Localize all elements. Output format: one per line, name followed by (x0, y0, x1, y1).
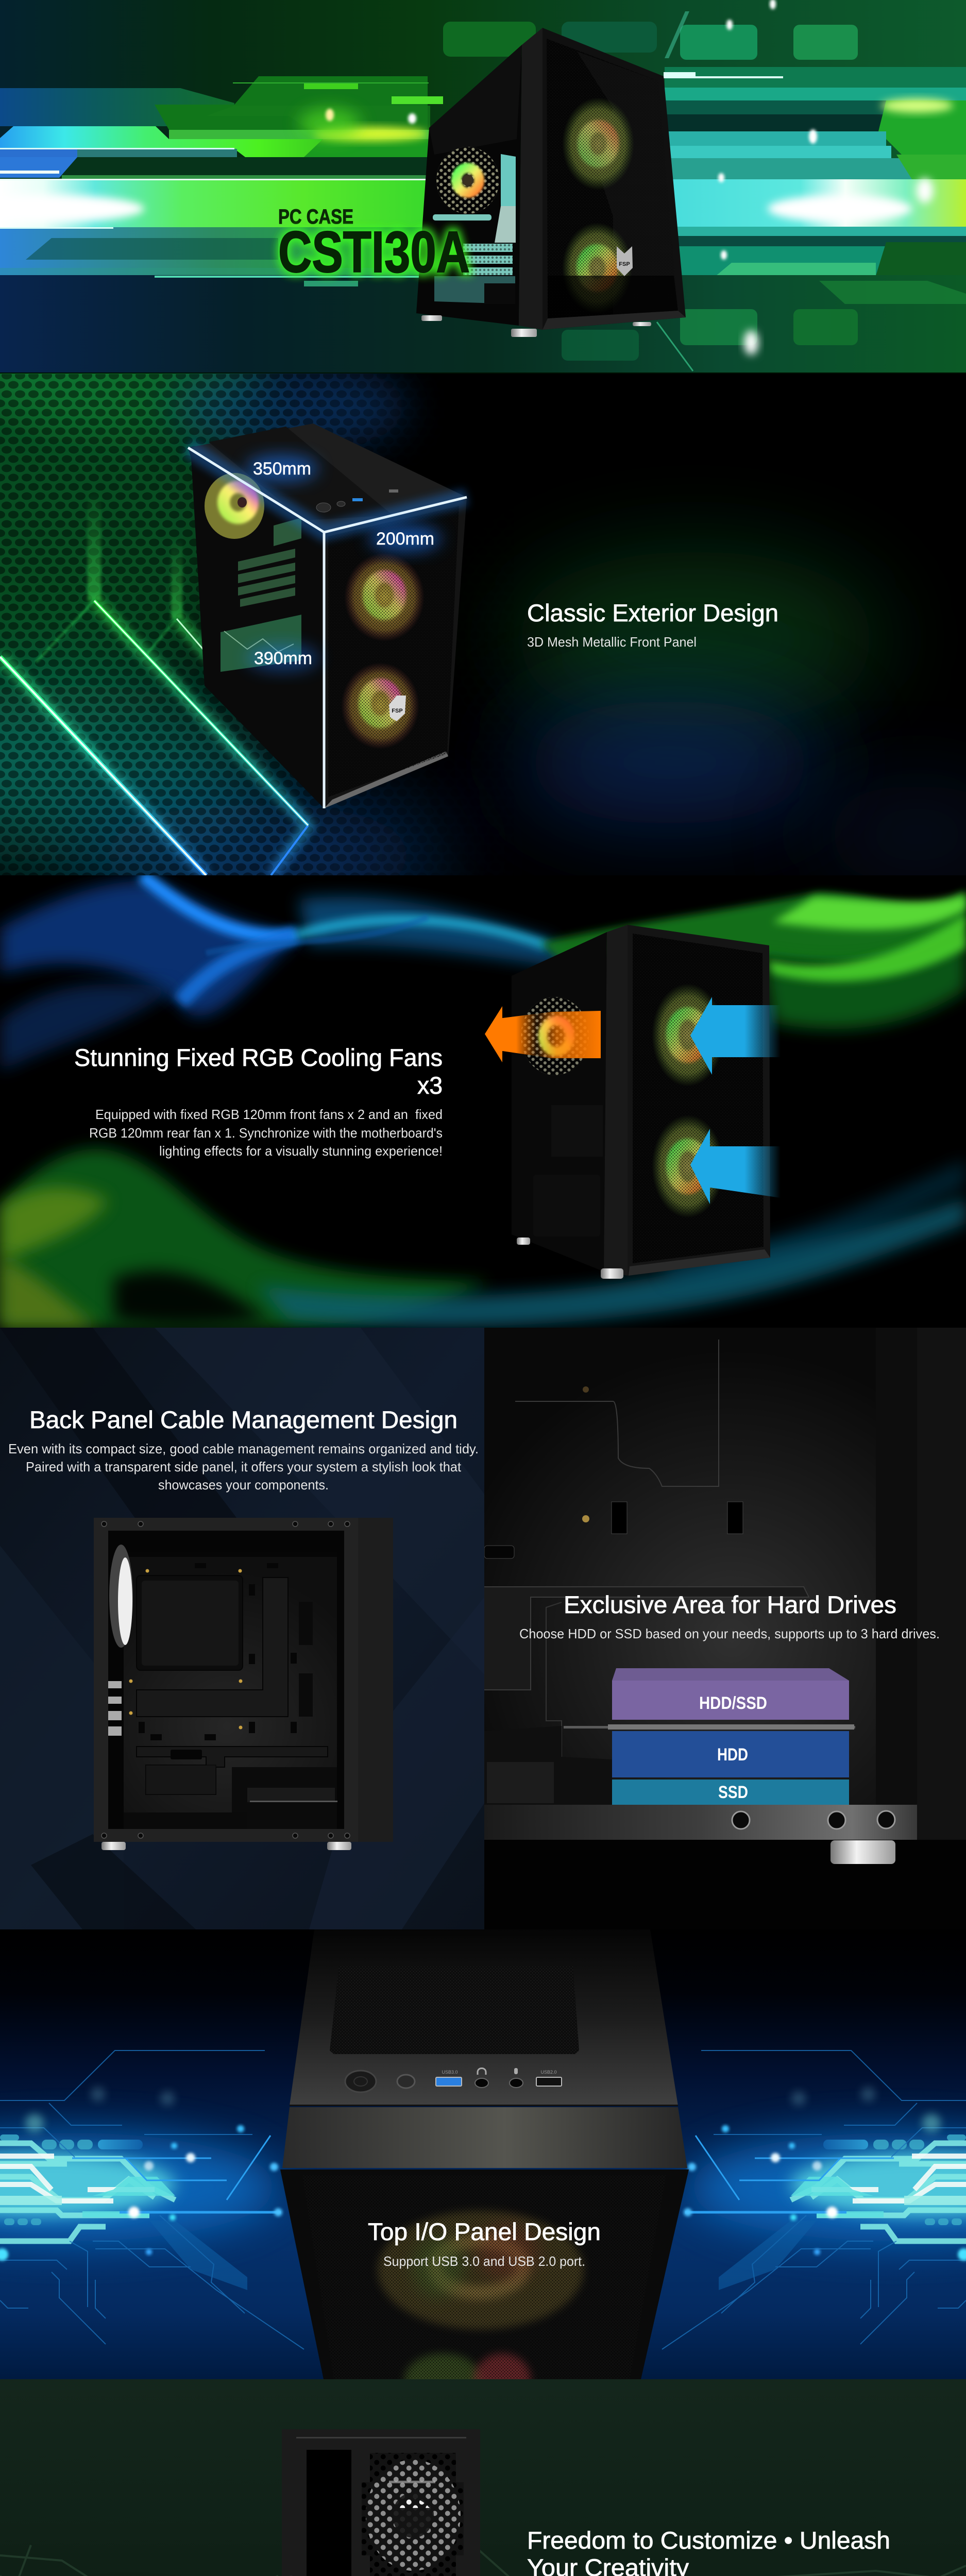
rear fan on side panel (436, 147, 499, 214)
headphone jack (475, 2068, 488, 2088)
panel: freedom to customize (0, 2379, 966, 2576)
drive: HDD blue bay (608, 1724, 854, 1777)
front fans behind mesh (547, 39, 678, 318)
dimension label: 200mm (369, 525, 441, 552)
body text: fan description: RGB 120mm rear fan x 1. Synchronize with the motherboard's (89, 1125, 443, 1141)
heading: Exclusive Area for Hard Drives: Exclusive Area for Hard Drives (564, 1591, 896, 1618)
heading: Freedom to Customize (527, 2527, 890, 2576)
square cutout (137, 1575, 243, 1670)
hero title: CSTI30A model name: CSTI30A (278, 219, 470, 284)
arrow: blue intake top (690, 997, 781, 1075)
subtext: front panel: 3D Mesh Metallic Front Panel (527, 634, 697, 650)
hero background bands (0, 0, 966, 374)
dimension background with hex mesh (0, 374, 966, 875)
chrome feet (517, 1238, 623, 1279)
dimension lines (188, 448, 467, 808)
front fan glow (378, 2211, 584, 2405)
expansion slots (108, 1681, 122, 1736)
body text: cable management: Even with its compact size, good cable management remains organized and tidy. (8, 1441, 479, 1456)
circuit board background (0, 2379, 966, 2576)
front fans (328, 506, 459, 797)
panel: RGB cooling fans (0, 875, 966, 1328)
front fans (633, 934, 764, 1263)
interior background (484, 1328, 966, 1929)
chrome feet (101, 1842, 351, 1850)
case front rail (484, 1805, 966, 1929)
drive: HDD/SSD purple bay (612, 1668, 849, 1720)
heading: Stunning Fixed RGB Cooling Fans x3 (74, 1044, 443, 1099)
panel: exclusive area for hard drives (484, 1328, 966, 1864)
PC case (512, 925, 770, 1279)
top I/O ports (345, 2068, 562, 2092)
PC case rear view (282, 2429, 480, 2576)
frame screws (101, 1521, 350, 1838)
hero product: PC case (416, 28, 686, 337)
slots (139, 1563, 297, 1740)
icon: FSP logo: FSP (392, 708, 403, 714)
hero light glints (326, 0, 933, 355)
body text: fan description: Equipped with fixed RGB 120mm front fans x 2 and an fixed (95, 1107, 443, 1122)
geometric navy background (0, 1328, 484, 1929)
PC case interior (94, 1518, 393, 1842)
icon: FSP logo: FSP (619, 261, 630, 267)
body text: cable management: showcases your components. (158, 1477, 329, 1493)
chrome feet (421, 315, 651, 337)
body text: cable management: Paired with a transparent side panel, it offers your system a stylish look that (26, 1459, 462, 1475)
dimension label: 350mm (246, 455, 318, 482)
microphone jack (510, 2068, 523, 2088)
USB 2.0 port (536, 2070, 562, 2086)
dimension label: 350mm: 350mm (253, 459, 311, 479)
icon: FSP logo (617, 246, 633, 276)
panel: back panel cable management (0, 1328, 484, 1929)
gold standoffs (129, 1569, 242, 1729)
raised L panel (137, 1578, 288, 1717)
subtext: hard drive support: Choose HDD or SSD based on your needs, supports up to 3 hard drives. (519, 1626, 940, 1641)
panel: top I/O panel design (0, 1941, 966, 2379)
rear fan (205, 473, 264, 539)
PC case front view (280, 1929, 689, 2405)
teal vent dots (433, 214, 492, 221)
drive: HDD/SSD purple bay: HDD/SSD (699, 1693, 767, 1713)
dimension label: 200mm: 200mm (376, 529, 434, 549)
body text: fan description: lighting effects for a visually stunning experience! (159, 1143, 443, 1159)
drive: SSD teal bay (612, 1780, 849, 1805)
hero title: CSTI30A model name: CSTI30A (278, 219, 470, 284)
heading: Classic Exterior Design: Classic Exterior Design (527, 599, 778, 626)
USB 3.0 port (436, 2070, 462, 2086)
white rear fan (109, 1545, 133, 1648)
dimension label: 390mm: 390mm (254, 649, 312, 668)
rear fan (521, 997, 589, 1075)
black PSU slot (307, 2450, 351, 2576)
drive: SSD teal bay: SSD (718, 1783, 748, 1802)
heading: Freedom to Customize: Freedom to Customize • Unleash (527, 2527, 890, 2554)
arrow: blue intake bottom (690, 1129, 781, 1204)
heading: Stunning Fixed RGB Cooling Fans x3: x3 (417, 1072, 443, 1099)
drive: HDD blue bay: HDD (717, 1745, 748, 1765)
heading: Stunning Fixed RGB Cooling Fans x3: Stunning Fixed RGB Cooling Fans (74, 1044, 443, 1071)
panel: classic exterior design (0, 374, 966, 875)
top panel I/O (316, 489, 398, 512)
arrow: orange exhaust (485, 1006, 601, 1062)
body text: cable management (8, 1441, 479, 1493)
neon floor lines (0, 489, 308, 875)
subtext: USB support: Support USB 3.0 and USB 2.0 port. (383, 2253, 585, 2269)
USB 2.0 port: USB2.0 (540, 2070, 557, 2075)
circuit background (0, 1929, 966, 2379)
panel: hero banner (0, 0, 966, 374)
heading: Top I/O Panel Design: Top I/O Panel Design (368, 2218, 601, 2245)
power button (345, 2071, 376, 2092)
USB 3.0 port: USB3.0 (442, 2070, 458, 2075)
dimension label: 390mm (247, 645, 319, 671)
ribbon background (0, 875, 966, 1328)
reset button (397, 2075, 415, 2088)
icon: FSP logo (389, 696, 406, 721)
heading: Back Panel Cable Management Design: Back Panel Cable Management Design (29, 1406, 457, 1433)
rear fan grille (362, 2453, 464, 2576)
PC case with dimension outline (188, 423, 467, 808)
body text: fan description (89, 1107, 443, 1159)
hero title: PC CASE: PC CASE (278, 206, 353, 228)
